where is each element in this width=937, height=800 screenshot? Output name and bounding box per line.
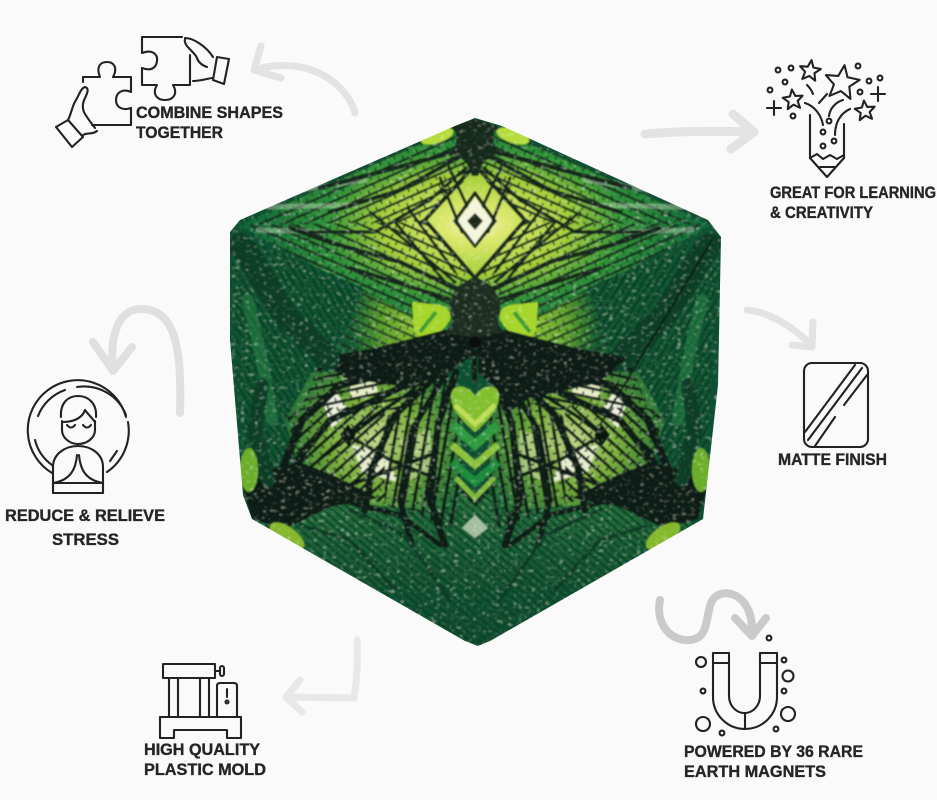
arrow to learning and creativity bbox=[645, 114, 754, 149]
label: combine shapes together: TOGETHER bbox=[136, 124, 223, 142]
cube lower face foliage bbox=[259, 489, 696, 634]
cube seams bbox=[250, 240, 712, 513]
cube left half pattern bbox=[230, 118, 475, 600]
cube top face bbox=[238, 118, 712, 335]
label: matte finish: MATTE FINISH bbox=[778, 451, 887, 469]
feature: great for learning and creativity bbox=[767, 59, 936, 222]
arrow to matte finish bbox=[747, 310, 813, 347]
label: high quality plastic mold bbox=[144, 741, 266, 779]
cube base colour bbox=[230, 118, 721, 524]
label: powered by 36 rare earth magnets: POWERED BY 36 RARE bbox=[684, 743, 863, 761]
feature: high quality plastic mold bbox=[144, 664, 266, 779]
arrow to reduce stress bbox=[93, 309, 180, 413]
label: powered by 36 rare earth magnets: EARTH MAGNETS bbox=[684, 763, 826, 781]
arrow to magnets bbox=[659, 593, 766, 640]
cube centre magnet dot bbox=[469, 336, 481, 348]
label: high quality plastic mold: PLASTIC MOLD bbox=[144, 761, 266, 779]
label: powered by 36 rare earth magnets bbox=[684, 743, 863, 781]
cube foliage speckle texture bbox=[225, 110, 727, 650]
label: reduce and relieve stress: REDUCE & RELIEVE bbox=[5, 507, 165, 525]
arrow to combine shapes bbox=[254, 46, 355, 113]
label: combine shapes together: COMBINE SHAPES bbox=[136, 104, 283, 122]
label: reduce and relieve stress bbox=[5, 507, 165, 549]
cube top blob bbox=[450, 118, 500, 176]
icon: glossy panel bbox=[804, 363, 868, 447]
feature: reduce and relieve stress bbox=[5, 380, 165, 549]
cube lower blob on top face bbox=[444, 276, 506, 338]
feature: powered by 36 rare earth magnets bbox=[684, 636, 863, 781]
icon: horseshoe magnet bbox=[696, 636, 795, 735]
label: combine shapes together bbox=[136, 104, 283, 142]
cube lower chevrons bbox=[452, 405, 498, 504]
arrow to plastic mold bbox=[286, 640, 357, 712]
icon: puzzle pieces and hands bbox=[56, 37, 229, 147]
product image: forest pattern magnetic cube bbox=[225, 110, 727, 650]
cube centre diamond bbox=[458, 197, 492, 244]
cube chevron heart bbox=[451, 386, 499, 432]
icon: meditating person bbox=[28, 380, 129, 493]
label: great for learning and creativity: & CREATIVITY bbox=[770, 204, 873, 222]
icon: pencil with stars bbox=[767, 59, 885, 177]
cube right half pattern, mirrored bbox=[475, 118, 720, 600]
feature: matte finish bbox=[778, 363, 887, 469]
icon: injection mold machine bbox=[160, 664, 241, 738]
label: high quality plastic mold: HIGH QUALITY bbox=[144, 741, 260, 759]
label: great for learning and creativity bbox=[770, 184, 936, 222]
cube central node bbox=[467, 213, 483, 230]
cube bright highlight at lower centre bbox=[462, 515, 488, 538]
feature: combine shapes together bbox=[56, 37, 283, 147]
cube stem above heart bbox=[472, 350, 477, 382]
label: reduce and relieve stress: STRESS bbox=[52, 531, 119, 549]
cube central dark mass bbox=[478, 340, 628, 415]
